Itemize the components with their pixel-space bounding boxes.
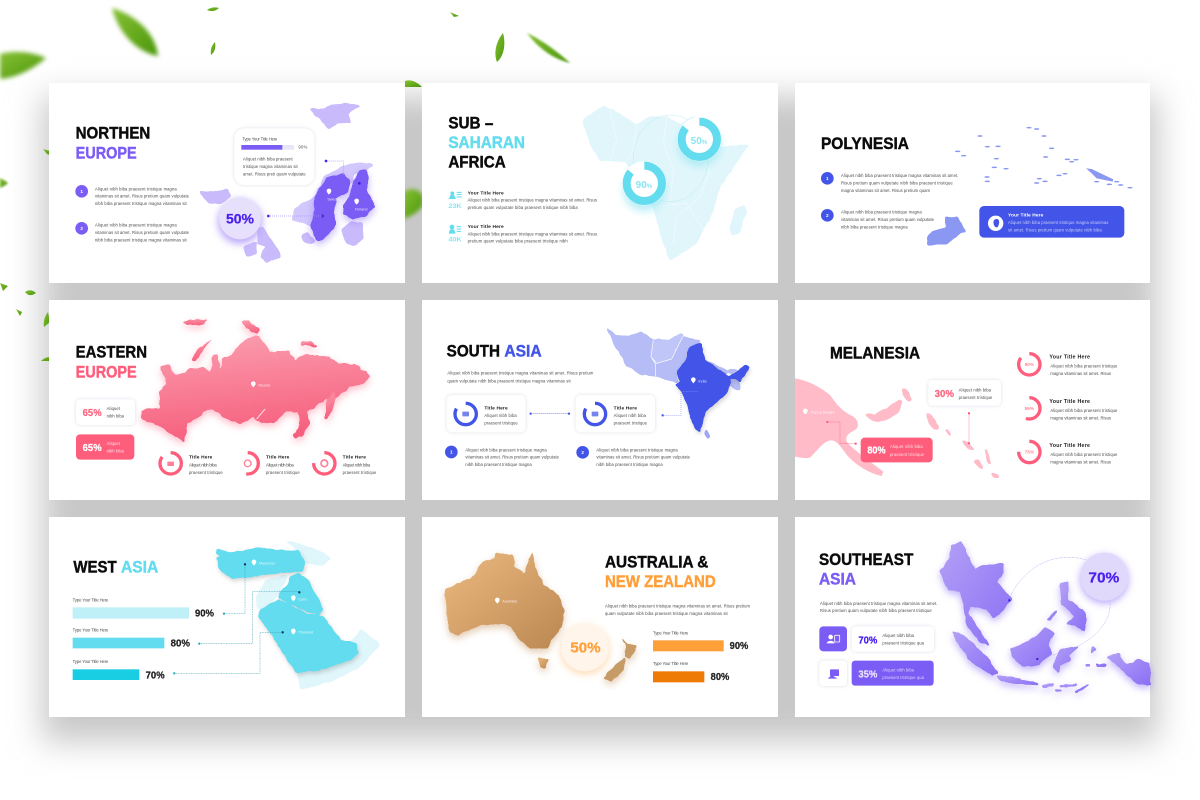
title: West Asia [73,558,158,577]
intro text [447,371,594,383]
title: West Asia: ASIA [121,558,158,577]
panel: Northern Europe [49,83,405,283]
numbered item 2: vitaminas sit amet. Risus pretium quam vulputate [841,217,935,222]
title: Sub-Saharan Africa: SUB – [448,113,493,132]
numbered item 1 [821,172,958,193]
numbered item 1: vitaminas sit amet. Risus pretium quam vulputate [95,194,190,199]
info card 1 [447,395,526,432]
bar 70%: 70% [146,670,165,681]
numbered item 2 [821,209,935,229]
map: Melanesian islands: Papua Niugini [811,411,835,415]
background card shadow [42,96,1158,742]
stat bubble 50% [561,623,609,674]
numbered item 2: 2 [826,213,829,218]
icon tile 1 [819,626,847,651]
numbered item 1: Aliquet nibh biba praesent tristique magna vitaminas sit amet. [841,173,958,178]
intro text: Aliquet nibh biba praesent tristique magna vitaminas sit amet. [820,601,937,606]
donut item 75%: magna vitaminas sit amet. Risus [1050,459,1111,464]
stat bubble 50%: 50% [570,640,601,656]
panel: Polynesia [795,83,1150,283]
numbered item 1: 1 [826,176,829,181]
title: Northen Europe: EUROPE [76,143,137,162]
stat card 65% outline [76,399,135,425]
stat card 70%: 70% [858,635,877,646]
info card 1: Aliquet nibh biba [484,413,517,418]
stat card 35%: Aliquet nibh biba [882,668,915,673]
title: Australia and New Zealand: AUSTRALIA & [605,552,708,571]
donut item 3 [314,453,377,475]
donut item 2: Aliquet nibh biba [266,462,294,467]
info card 2: praesent tristique [614,420,648,425]
callout: blue box: sit amet. Risus pretium quam vulputate nibh biba [1008,228,1102,233]
title: Sub-Saharan Africa [448,113,525,172]
stat card 70%: praesent tristique qua [882,640,925,645]
arrow: connector [529,412,570,415]
donut item 55%: Your Title Here [1049,399,1090,405]
callout: blue box [979,206,1124,238]
title: Eastern Europe [76,343,147,381]
donut item 3: praesent tristique [343,470,377,475]
callout: progress card: Type Your Title Here [242,136,278,141]
numbered item 1: magna vitaminas sit amet. Risus pretium quam [841,188,931,193]
bar 90% [653,630,748,652]
donut item 90% [1019,354,1118,376]
numbered item 1 [445,446,560,467]
donut item 90%: magna vitaminas sit amet. Risus [1050,371,1111,376]
title: Northen Europe: NORTHEN [76,123,150,142]
numbered item 1: 1 [80,189,83,194]
panel: Melanesia [795,300,1150,500]
title: Sub-Saharan Africa: AFRICA [448,153,506,172]
numbered item 2: Aliquet nibh biba praesent tristique magna [596,447,678,452]
info card 1: Title Here [484,405,508,411]
map: South Asia [605,326,750,439]
donut item 3: Title Here [343,455,366,461]
callout: progress card: amet. Risus preti quam vulputate [243,171,306,176]
info card 2 [576,395,655,432]
donut chart 90% [622,161,666,211]
title: West Asia: WEST [73,558,117,577]
stat card 65% outline: 65% [83,408,102,419]
intro text: Risus pretium quam vulputate nibh biba praesent tristique [820,608,932,613]
stat card 30%: praesent tristique [959,395,993,400]
numbered item 1 [75,185,190,206]
stat card 65% filled: Aliquet [107,441,121,446]
bar 70% [73,659,165,681]
map: Southeast Asia [940,542,1150,693]
panel: South Asia [422,300,778,500]
map: West Asia: Thailand [298,631,313,635]
donut item 1: Title Here [189,455,213,461]
stat card 65% filled: nibh biba [107,448,125,453]
info card 1: praesent tristique [484,420,518,425]
stat card 35%: praesent tristique qua [882,675,925,680]
map: New Zealand [603,636,638,682]
decorative leaves [0,7,570,361]
title: Polynesia: POLYNESIA [821,134,909,153]
donut item 90%: 90% [1025,362,1035,367]
bar 80%: 80% [171,639,190,650]
numbered item 1: Risus pretium quam vulputate nibh biba praesent tristique [841,181,953,186]
numbered item 2: nibh biba praesent tristique magna vitaminas sit [95,237,188,242]
numbered item 2: Aliquet nibh biba praesent tristique magna [841,210,922,215]
bar 70%: Type Your Title Here [73,659,109,664]
stat card 80% [861,438,933,462]
stat row 40K: 40K [448,236,462,243]
stat card 80%: praesent tristique [890,452,925,457]
map: northern Europe [199,103,375,262]
numbered item 2 [75,222,190,242]
title: Australia and New Zealand [605,552,716,591]
map: Polynesian islands [927,127,1133,245]
map: West Asia: Myanmar [259,562,276,566]
title: South Asia [447,342,542,361]
callout: blue box: Your Title Here [1008,213,1044,219]
stat bubble 70%: 70% [1088,570,1119,586]
stat card 80%: Aliquet nibh biba [890,444,923,449]
panel: Southeast Asia [795,517,1150,717]
intro text [820,601,937,613]
stat row 23K: pretium quam vulputate biba praesent tristique nibh biba [468,205,578,210]
numbered item 1: 1 [450,450,453,455]
title: Sub-Saharan Africa: SAHARAN [448,133,525,152]
donut chart 50%: 50% [691,136,708,147]
donut item 1: Aliquet nibh biba [189,462,217,467]
title: Southeast Asia [819,550,914,589]
map: Russia [142,319,370,442]
callout: progress card [234,128,314,185]
title: Southeast Asia: SOUTHEAST [819,550,914,569]
stat row 23K: Your Title Here [468,191,504,197]
bar 80%: 80% [711,672,729,683]
donut item 90%: Your Title Here [1049,354,1090,360]
numbered item 1: nibh biba praesent tristique magna [465,462,532,467]
map: Australia [445,552,564,668]
intro text: quam vulputate nibh biba praesent tristique magna vitaminas sit [447,378,572,383]
donut item 75%: Aliquet nibh biba praesent tristique [1050,452,1118,457]
title: Southeast Asia: ASIA [819,570,856,589]
stat card 35% [852,661,934,686]
numbered item 2: 2 [80,226,83,231]
stat card 30%: 30% [935,389,954,400]
intro text: quam vulputate nibh biba praesent tristique magna vitaminas sit [605,611,729,616]
bar 80% [73,627,190,650]
stat bubble 70% [1080,553,1128,603]
stat card 80%: 80% [867,446,886,457]
stat card 30%: Aliquet nibh biba [959,387,992,392]
numbered item 2 [576,446,691,467]
stat card 65% outline: Aliquet [107,406,121,411]
donut item 55%: Aliquet nibh biba praesent tristique [1050,408,1118,413]
map: northern Europe: Finland [355,208,368,212]
stat row 40K: Your Title Here [468,224,504,230]
callout: progress card: 90% [298,144,308,149]
donut item 55% [1019,398,1118,420]
donut item 55%: 55% [1025,406,1035,411]
stat card 35%: 35% [858,669,877,680]
donut item 55%: magna vitaminas sit amet. Risus [1050,415,1111,420]
stat row 40K: pretium quam vulputate biba praesent tristique nibh [468,239,568,244]
donut item 3: Aliquet nibh biba [343,462,371,467]
numbered item 2: vitaminas sit amet. Risus pretium quam vulputate [596,455,691,460]
bar 90%: 90% [730,641,748,652]
stat card 65% outline: nibh biba [107,413,125,418]
donut item 90%: Aliquet nibh biba praesent tristique [1050,364,1118,369]
donut item 2: Title Here [266,455,290,461]
map: Australia: Australia [502,600,518,604]
numbered item 1: Aliquet nibh biba praesent tristique magna [465,447,547,452]
info card 2: Aliquet nibh biba [614,413,647,418]
panel: Australia and New Zealand [422,517,778,717]
donut item 75% [1019,441,1118,464]
donut chart 50% [677,117,721,166]
title: Australia and New Zealand: NEW ZEALAND [605,572,716,591]
map: Melanesian islands [795,378,1000,479]
panel: West Asia [49,517,405,717]
donut item 1: praesent tristique [189,470,223,475]
numbered item 2: 2 [581,450,584,455]
stat row 23K: Aliquet nibh biba praesent tristique magna vitaminas sit amet. Risus [468,197,597,202]
stat bubble 50% [218,197,262,244]
intro text: Aliquet nibh biba praesent tristique magna vitaminas sit amet. Risus pretium [447,371,594,376]
numbered item 1: nibh biba praesent tristique magna vitaminas sit [95,201,188,206]
donut item 75%: 75% [1025,450,1035,455]
map: Africa [583,106,748,261]
stat row 40K: Aliquet nibh biba praesent tristique magna vitaminas sit amet. Risus [468,231,597,236]
bar 80%: Type Your Title Here [73,627,109,632]
title: South Asia: SOUTH [447,342,500,361]
bar 90%: Type Your Title Here [73,598,109,603]
stat bubble 50%: 50% [226,210,255,226]
title: Melanesia: MELANESIA [830,344,920,363]
numbered item 2: nibh biba praesent tristique magna [841,224,908,229]
donut chart 90%: 90% [636,180,653,191]
donut item 75%: Your Title Here [1049,443,1090,449]
donut item 1 [160,453,223,475]
icon tile 2 [819,661,847,686]
map: West Asia [173,541,380,690]
title: Eastern Europe: EASTERN [76,343,147,362]
panel: Eastern Europe [49,300,405,500]
stat card 30% [928,380,1001,406]
stat card 65% filled: 65% [83,443,102,454]
stat row 23K [448,191,597,210]
callout: progress card: tristique magna vitaminas sit [243,164,299,169]
title: Northen Europe [76,123,150,162]
stat row 23K: 23K [448,203,462,210]
panel: Sub-Saharan Africa [422,83,778,283]
numbered item 1: vitaminas sit amet. Risus pretium quam vulputate [465,455,560,460]
map: Russia: Russia [258,384,271,388]
arrow: dotted route lines [1008,557,1110,660]
callout: progress card: Aliquet nibh biba praesent [243,157,294,162]
title: South Asia: ASIA [504,342,542,361]
stat row 40K [448,224,597,244]
callout: blue box: Aliquet nibh biba praesent tristique magna vitaminas [1008,220,1108,225]
info card 2: Title Here [614,405,637,411]
intro text [605,604,751,616]
numbered item 1: Aliquet nibh biba praesent tristique magna [95,186,177,191]
title: Eastern Europe: EUROPE [76,362,137,381]
bar 90% [73,598,214,620]
numbered item 2: Aliquet nibh biba praesent tristique magna [95,223,177,228]
stat card 65% filled [76,434,134,460]
donut item 2: praesent tristique [266,470,300,475]
numbered item 2: vitaminas sit amet. Risus pretium quam vulputate [95,230,190,235]
bar 80%: Type Your Title Here [653,661,689,666]
bar 90%: Type Your Title Here [653,630,689,635]
stat card 70%: Aliquet nibh biba [882,633,915,638]
map: South Asia: India [698,380,708,384]
stat card 70% [852,626,934,652]
donut item 2 [237,453,300,475]
intro text: Aliquet nibh biba praesent tristique magna vitaminas sit amet. Risus pretium [605,604,751,609]
bar 80% [653,661,729,683]
map: West Asia: Cairo [298,597,307,601]
map: northern Europe: Sweden [327,198,341,202]
numbered item 2: nibh biba praesent tristique magna [596,462,663,467]
bar 90%: 90% [195,609,214,620]
